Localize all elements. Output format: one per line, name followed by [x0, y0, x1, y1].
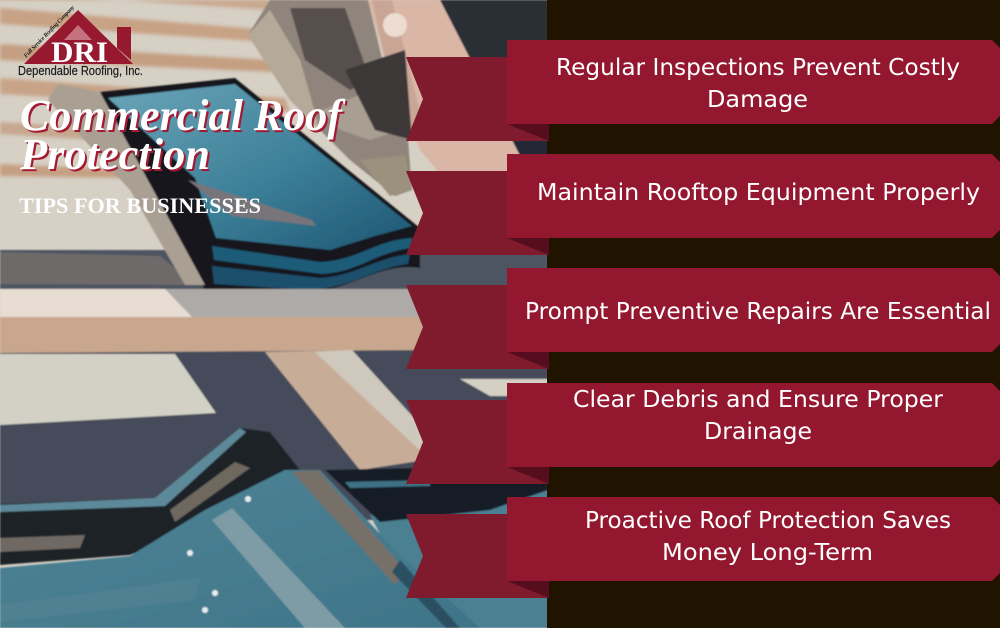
ribbon 4: Drainage [704, 419, 812, 445]
dark stack under blue tile [100, 78, 420, 292]
textured cream panel [0, 354, 216, 425]
title: Commercial Roof [22, 93, 348, 142]
ribbon 5 [406, 497, 1000, 598]
light plank band [0, 289, 548, 318]
teal lower tile [0, 470, 480, 628]
title: Protection [21, 132, 212, 181]
subtitle: TIPS FOR BUSINESSES [19, 193, 261, 218]
ribbon 5: Money Long-Term [662, 540, 873, 566]
logo: Dependable Roofing [18, 5, 143, 78]
teal lower right [370, 485, 548, 628]
ribbon 1: Regular Inspections Prevent Costly [556, 55, 960, 81]
glove [248, 0, 412, 196]
ribbon 5: Proactive Roof Protection Saves [585, 508, 951, 534]
ribbon 1 [406, 40, 1000, 141]
slate band upper [0, 250, 548, 290]
ribbon 1: Damage [707, 87, 808, 113]
ribbon 4: Clear Debris and Ensure Proper [573, 387, 944, 413]
title [19, 91, 348, 181]
wood rail [0, 317, 425, 353]
logo: Dependable Roofing: Full Service Roofing Company [23, 5, 76, 59]
cream patch right [460, 379, 548, 396]
ladder edge of stack [48, 84, 205, 285]
ribbon 3 [406, 268, 1000, 369]
photo: roof tiles background [0, 0, 548, 628]
panel: dark right background [547, 0, 1000, 628]
beam [265, 350, 425, 470]
dark gloss bands [325, 465, 548, 522]
title: Protection [19, 130, 210, 179]
ribbon 2 [406, 154, 1000, 255]
title: Commercial Roof [20, 91, 346, 140]
ribbon 3: Prompt Preventive Repairs Are Essential [525, 299, 991, 325]
logo: Dependable Roofing: Dependable Roofing, Inc. [18, 64, 143, 78]
upper tile [108, 84, 412, 250]
ribbon 2: Maintain Rooftop Equipment Properly [537, 180, 980, 206]
pink arm [368, 0, 548, 284]
logo: Dependable Roofing: DRI [51, 36, 108, 69]
dark top right [440, 0, 548, 70]
ribbon 4 [406, 383, 1000, 484]
slate lower [0, 350, 548, 520]
layered blue bands [212, 238, 412, 274]
